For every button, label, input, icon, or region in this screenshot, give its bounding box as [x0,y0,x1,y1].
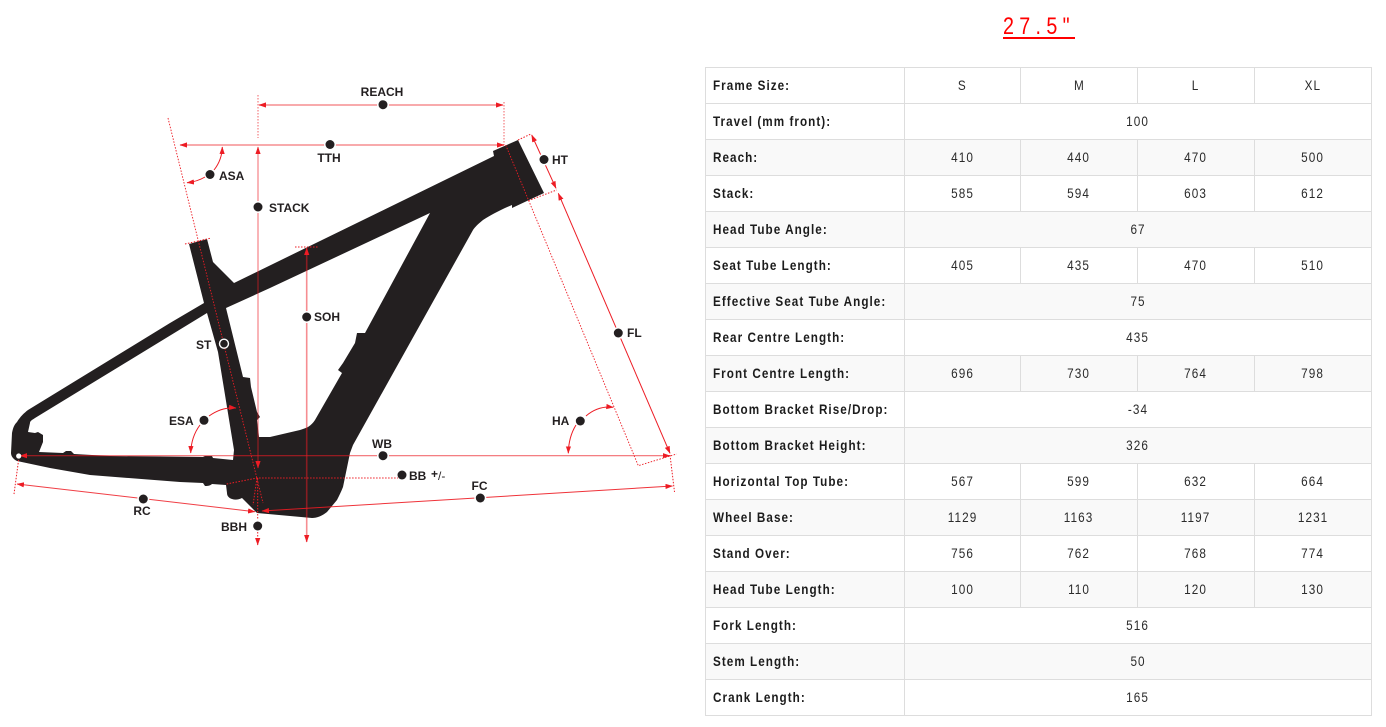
label: TTH: TTH [317,151,341,165]
table rows: 762 [1068,544,1090,560]
table rows: 1129 [948,508,977,524]
geometry table [705,67,1372,716]
table rows: 435 [1068,256,1090,272]
table rows: Seat Tube Length: [713,256,832,272]
table rows: Effective Seat Tube Angle: [713,292,886,308]
angle arc: HA [568,407,613,453]
table rows: 50 [1130,652,1146,668]
label: REACH [361,85,403,111]
label: HA [552,414,585,428]
table rows: 567 [951,472,974,488]
dimension: head tube [518,134,557,201]
table rows: 500 [1302,148,1324,164]
table rows: M [1074,76,1084,92]
dimension: rear centre [14,457,255,512]
label: RC [133,493,151,518]
label: WB: WB [372,437,392,451]
table rows: Head Tube Angle: [713,220,828,236]
dimension: fork length [558,193,670,453]
table rows: L [1192,76,1200,92]
label: RC: RC [133,504,151,518]
table rows: 130 [1302,580,1324,596]
table rows: 75 [1130,292,1146,308]
table rows: 768 [1185,544,1207,560]
table rows: Wheel Base: [713,508,794,524]
bike frame silhouette [11,140,544,518]
table rows: Crank Length: [713,688,806,704]
label: SOH: SOH [314,310,340,324]
label: FL [612,326,642,340]
table rows: Front Centre Length: [713,364,850,380]
table rows: 110 [1068,580,1090,596]
table rows: 435 [1127,328,1149,344]
table rows: 470 [1185,148,1207,164]
label: SOH [301,310,340,324]
label: BB +/-: BB [409,469,427,483]
table rows: 612 [1302,184,1324,200]
title: wheel size: 27.5" [1003,13,1075,40]
table rows: 440 [1068,148,1090,164]
label: HA: HA [552,414,570,428]
labels with dots [133,85,642,534]
table rows: 756 [951,544,974,560]
geometry diagram [11,85,677,546]
label: HT: HT [552,153,569,167]
table rows: XL [1305,76,1321,92]
angle arc: ESA [191,408,236,453]
label: REACH: REACH [361,85,403,99]
label: ST: ST [196,338,212,352]
table rows: S [958,76,967,92]
table rows: 470 [1185,256,1207,272]
label: ASA: ASA [219,169,245,183]
table rows: 730 [1068,364,1090,380]
table rows: Reach: [713,148,758,164]
table rows: Rear Centre Length: [713,328,845,344]
label: BB +/-: + [431,467,438,481]
dimension: bottom bracket drop [227,478,398,484]
dimension: stack [257,147,259,468]
table rows: 410 [951,148,974,164]
table rows: 594 [1068,184,1090,200]
label: ST [196,338,228,352]
table rows: 1163 [1064,508,1094,524]
table rows: 100 [1127,112,1149,128]
dimension: stand over height [295,247,318,542]
rear axle marker [16,453,21,459]
dimension: reach [258,95,504,145]
table rows: Frame Size: [713,76,790,92]
table rows: 764 [1185,364,1207,380]
table rows: 67 [1130,220,1146,236]
table rows: 774 [1302,544,1324,560]
dimension lines [14,95,677,545]
label: BBH [221,520,264,534]
label: TTH [317,138,341,165]
table rows: 516 [1127,616,1149,632]
table rows: 510 [1302,256,1324,272]
table rows [713,76,1328,705]
table rows: 405 [951,256,974,272]
table rows: Stand Over: [713,544,791,560]
label: STACK: STACK [269,201,310,215]
label: ASA [206,169,245,183]
label: BBH: BBH [221,520,247,534]
table rows: 599 [1068,472,1090,488]
table rows: Bottom Bracket Height: [713,436,867,452]
table rows: Stack: [713,184,754,200]
label: BB +/-: /- [438,469,445,483]
label: ESA: ESA [169,414,194,428]
table rows: Bottom Bracket Rise/Drop: [713,400,888,416]
table rows: Stem Length: [713,652,800,668]
table rows: 120 [1185,580,1207,596]
table rows: 798 [1302,364,1324,380]
seat tube axis [168,118,263,503]
table rows: Fork Length: [713,616,797,632]
steering axis [506,145,677,466]
label: FC: FC [472,479,488,493]
table rows: 696 [951,364,974,380]
table rows: 585 [951,184,974,200]
label: WB [372,437,392,462]
dimension: wheelbase [20,455,670,457]
table rows: 603 [1185,184,1207,200]
label: FC [472,479,488,504]
table rows: 632 [1185,472,1207,488]
dimension: top tube [180,144,504,146]
table rows: 326 [1127,436,1149,452]
table rows: Horizontal Top Tube: [713,472,849,488]
table rows: -34 [1128,400,1148,416]
table rows: 1197 [1181,508,1211,524]
label: HT [538,153,569,167]
table rows: Head Tube Length: [713,580,836,596]
table rows: 165 [1127,688,1149,704]
dimension: front centre [262,455,674,511]
table rows: Travel (mm front): [713,112,831,128]
table rows: 1231 [1298,508,1328,524]
table rows: 100 [951,580,974,596]
angle arc: ASA [187,147,222,183]
label: ESA [169,414,208,428]
table rows: 664 [1302,472,1324,488]
label: FL: FL [627,326,642,340]
dimension: bottom bracket height [253,478,258,545]
label: BB +/- [398,467,445,483]
